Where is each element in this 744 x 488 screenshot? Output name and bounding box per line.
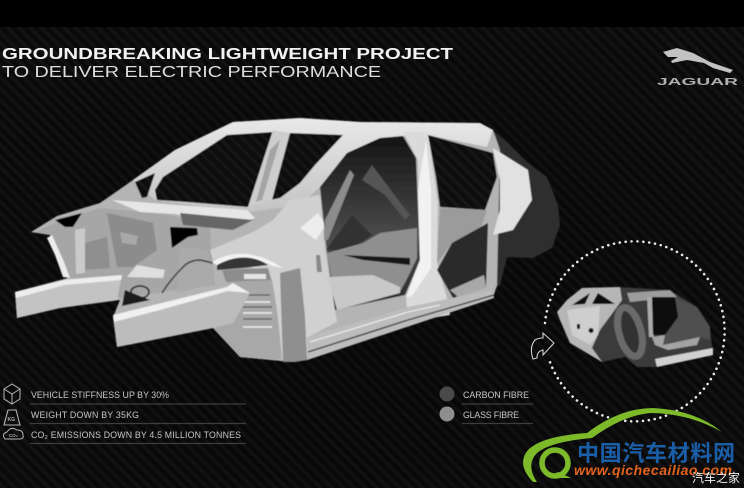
source mark: 汽车之家 xyxy=(692,470,740,485)
title: GROUNDBREAKING LIGHTWEIGHT PROJECT xyxy=(2,46,453,63)
main vehicle body structure xyxy=(15,118,560,362)
inset rear beam xyxy=(655,348,713,367)
inset windows xyxy=(572,293,590,305)
icon: weight xyxy=(4,410,20,425)
icon: stiffness cube xyxy=(4,384,20,404)
windscreen xyxy=(155,132,273,207)
icon: CO2 cloud: CO₂ xyxy=(9,433,18,438)
windscreen pillar xyxy=(248,130,290,207)
B pillar xyxy=(403,132,450,322)
inset front section xyxy=(557,287,622,362)
icon: Jaguar logo: JAGUAR xyxy=(657,77,738,88)
rear door opening interior xyxy=(320,136,420,310)
rear floor xyxy=(437,208,487,263)
wheel arch details xyxy=(212,254,283,268)
rear pillar xyxy=(493,148,532,235)
inset pillar xyxy=(647,297,654,337)
inset floor xyxy=(652,335,700,350)
stiffness text: VEHICLE STIFFNESS UP BY 30% xyxy=(31,390,169,400)
specs list xyxy=(3,384,246,444)
front chassis beams xyxy=(15,275,122,318)
inset rear panel xyxy=(653,297,710,345)
legend: glass fibre: GLASS FIBRE xyxy=(463,410,519,420)
sill xyxy=(307,290,494,360)
inset tyre arch xyxy=(613,305,647,359)
body shell xyxy=(15,118,500,362)
cowl panel xyxy=(112,200,255,227)
inset top band xyxy=(627,290,677,302)
emissions text: CO₂ EMISSIONS DOWN BY 4.5 MILLION TONNES xyxy=(31,430,241,440)
icon: Jaguar logo xyxy=(657,48,738,88)
front fender and A pillar xyxy=(210,195,337,362)
legend xyxy=(440,386,533,424)
inset rear opening xyxy=(652,297,678,335)
inset door holes xyxy=(577,324,594,333)
quarter window xyxy=(135,173,155,198)
cabin floor xyxy=(327,228,417,310)
icon: CO2 cloud xyxy=(3,428,23,439)
inset: rear view of vehicle xyxy=(557,287,713,367)
rear wheel arch in carbon fibre xyxy=(470,127,560,292)
inset body xyxy=(557,287,713,367)
roof rail and pillars xyxy=(133,118,493,212)
inset: dotted circle xyxy=(545,241,725,421)
title xyxy=(2,46,453,81)
engine bay openings xyxy=(170,227,198,248)
watermark logo xyxy=(523,408,740,485)
front engine bay xyxy=(36,208,215,298)
green car swoosh xyxy=(523,408,722,482)
icon: rotate arrow xyxy=(531,333,554,359)
watermark Chinese name: 中国汽车材料网 xyxy=(577,441,735,466)
green Q mark xyxy=(542,450,571,478)
legend: carbon fibre: CARBON FIBRE xyxy=(463,390,529,400)
rear door window xyxy=(428,135,497,210)
icon: weight: KG xyxy=(8,417,15,423)
watermark URL: www.qichecailiao.com xyxy=(574,462,732,478)
front door window xyxy=(270,133,343,200)
weight text: WEIGHT DOWN BY 35KG xyxy=(31,410,139,420)
title: TO DELIVER ELECTRIC PERFORMANCE xyxy=(2,64,381,81)
